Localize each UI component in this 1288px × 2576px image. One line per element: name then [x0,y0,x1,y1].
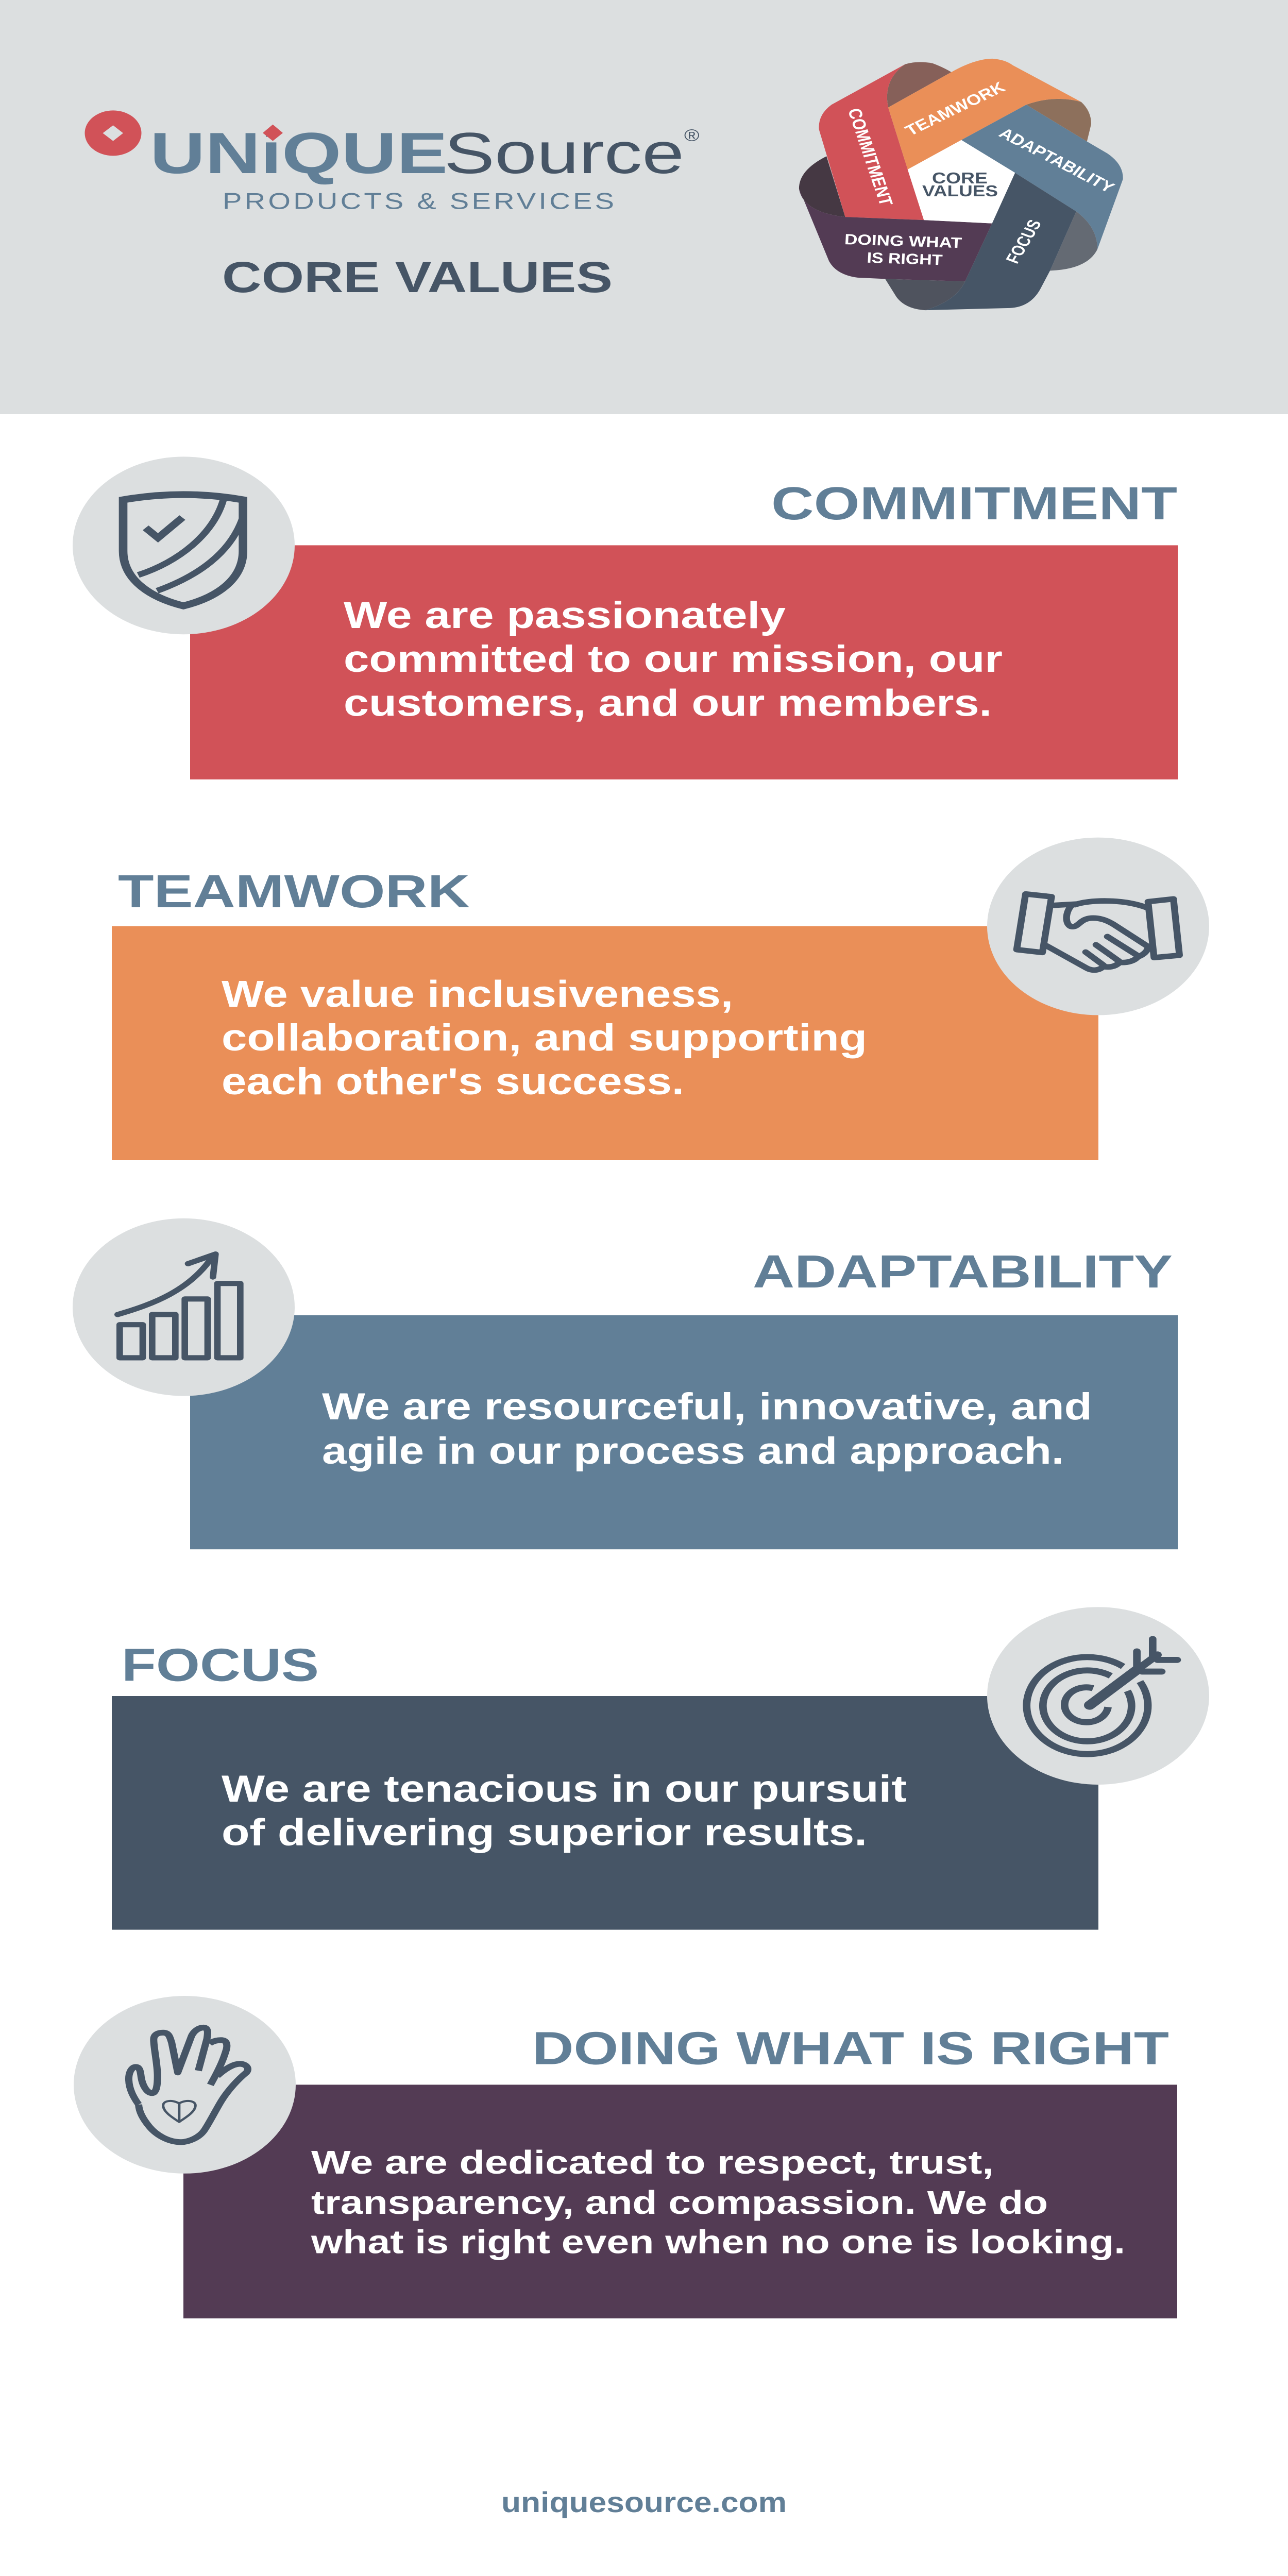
icon circle [73,456,295,634]
panel box [112,926,1098,1160]
body text [344,594,1003,724]
icon: handshake [1016,894,1179,970]
panel box [183,2084,1177,2318]
icon circle [987,838,1209,1015]
ribbon label: is right: IS RIGHT [867,249,943,268]
ribbon label: teamwork: TEAMWORK [902,78,1009,139]
heading: TEAMWORK [118,865,470,917]
icon: hand with heart [129,2027,248,2142]
body text [311,2144,1125,2261]
icon: growth chart [117,1254,240,1358]
panel box [190,1315,1178,1549]
logo wordmark: Source: Source [444,121,684,186]
panel box [112,1696,1098,1930]
registered mark: ® [684,126,700,145]
ribbon label: doing what: DOING WHAT [844,230,962,251]
body text: We value inclusiveness, [222,973,733,1015]
panel: focus [112,1607,1209,1930]
panel: doing what is right [74,1996,1177,2318]
center label: core values [922,170,998,200]
heading: COMMITMENT [771,477,1177,529]
panel: commitment [73,456,1178,779]
logo: UniqueSource [84,110,700,214]
icon circle [987,1607,1209,1785]
logo wordmark: UNiQUE: UNiQUE [150,121,448,186]
heading: DOING WHAT IS RIGHT [532,2022,1169,2074]
body text: We are passionately [344,594,786,636]
body text [222,1768,907,1854]
panel: header [0,0,1288,414]
body text: of delivering superior results. [222,1811,867,1854]
ribbon label: adaptability: ADAPTABILITY [995,124,1118,196]
body text: committed to our mission, our [344,638,1003,680]
icon circle [73,1218,295,1396]
body text: transparency, and compassion. We do [311,2184,1048,2221]
body text: agile in our process and approach. [322,1430,1064,1472]
center label: core values: CORE [932,170,988,187]
ribbon label: focus: FOCUS [1002,217,1045,266]
body text: We are resourceful, innovative, and [322,1385,1092,1428]
panel box [190,545,1178,779]
title: CORE VALUES [222,253,613,302]
body text: customers, and our members. [344,682,992,724]
footer url: uniquesource.com [501,2487,787,2518]
icon: shield with check [123,495,243,606]
center label: core values: VALUES [922,182,998,200]
logo tagline: PRODUCTS & SERVICES [223,188,614,214]
body text: We are dedicated to respect, trust, [311,2144,994,2181]
panel: teamwork [112,838,1209,1160]
heading: ADAPTABILITY [753,1245,1173,1298]
body text: each other's success. [222,1060,684,1103]
panel: adaptability [73,1218,1178,1549]
icon circle [74,1996,296,2174]
body text: We are tenacious in our pursuit [222,1768,907,1810]
body text: collaboration, and supporting [222,1016,867,1059]
body text: what is right even when no one is looking. [311,2224,1125,2261]
diagram: core values ribbon pentagon [799,59,1123,310]
icon: target with arrow [1027,1639,1177,1754]
body text [322,1385,1092,1472]
logo diamond over i [263,125,283,141]
ribbon label: commitment: COMMITMENT [844,107,897,208]
icon: logo red circle with diamond [84,110,141,156]
body text [222,973,867,1103]
heading: FOCUS [122,1638,319,1691]
